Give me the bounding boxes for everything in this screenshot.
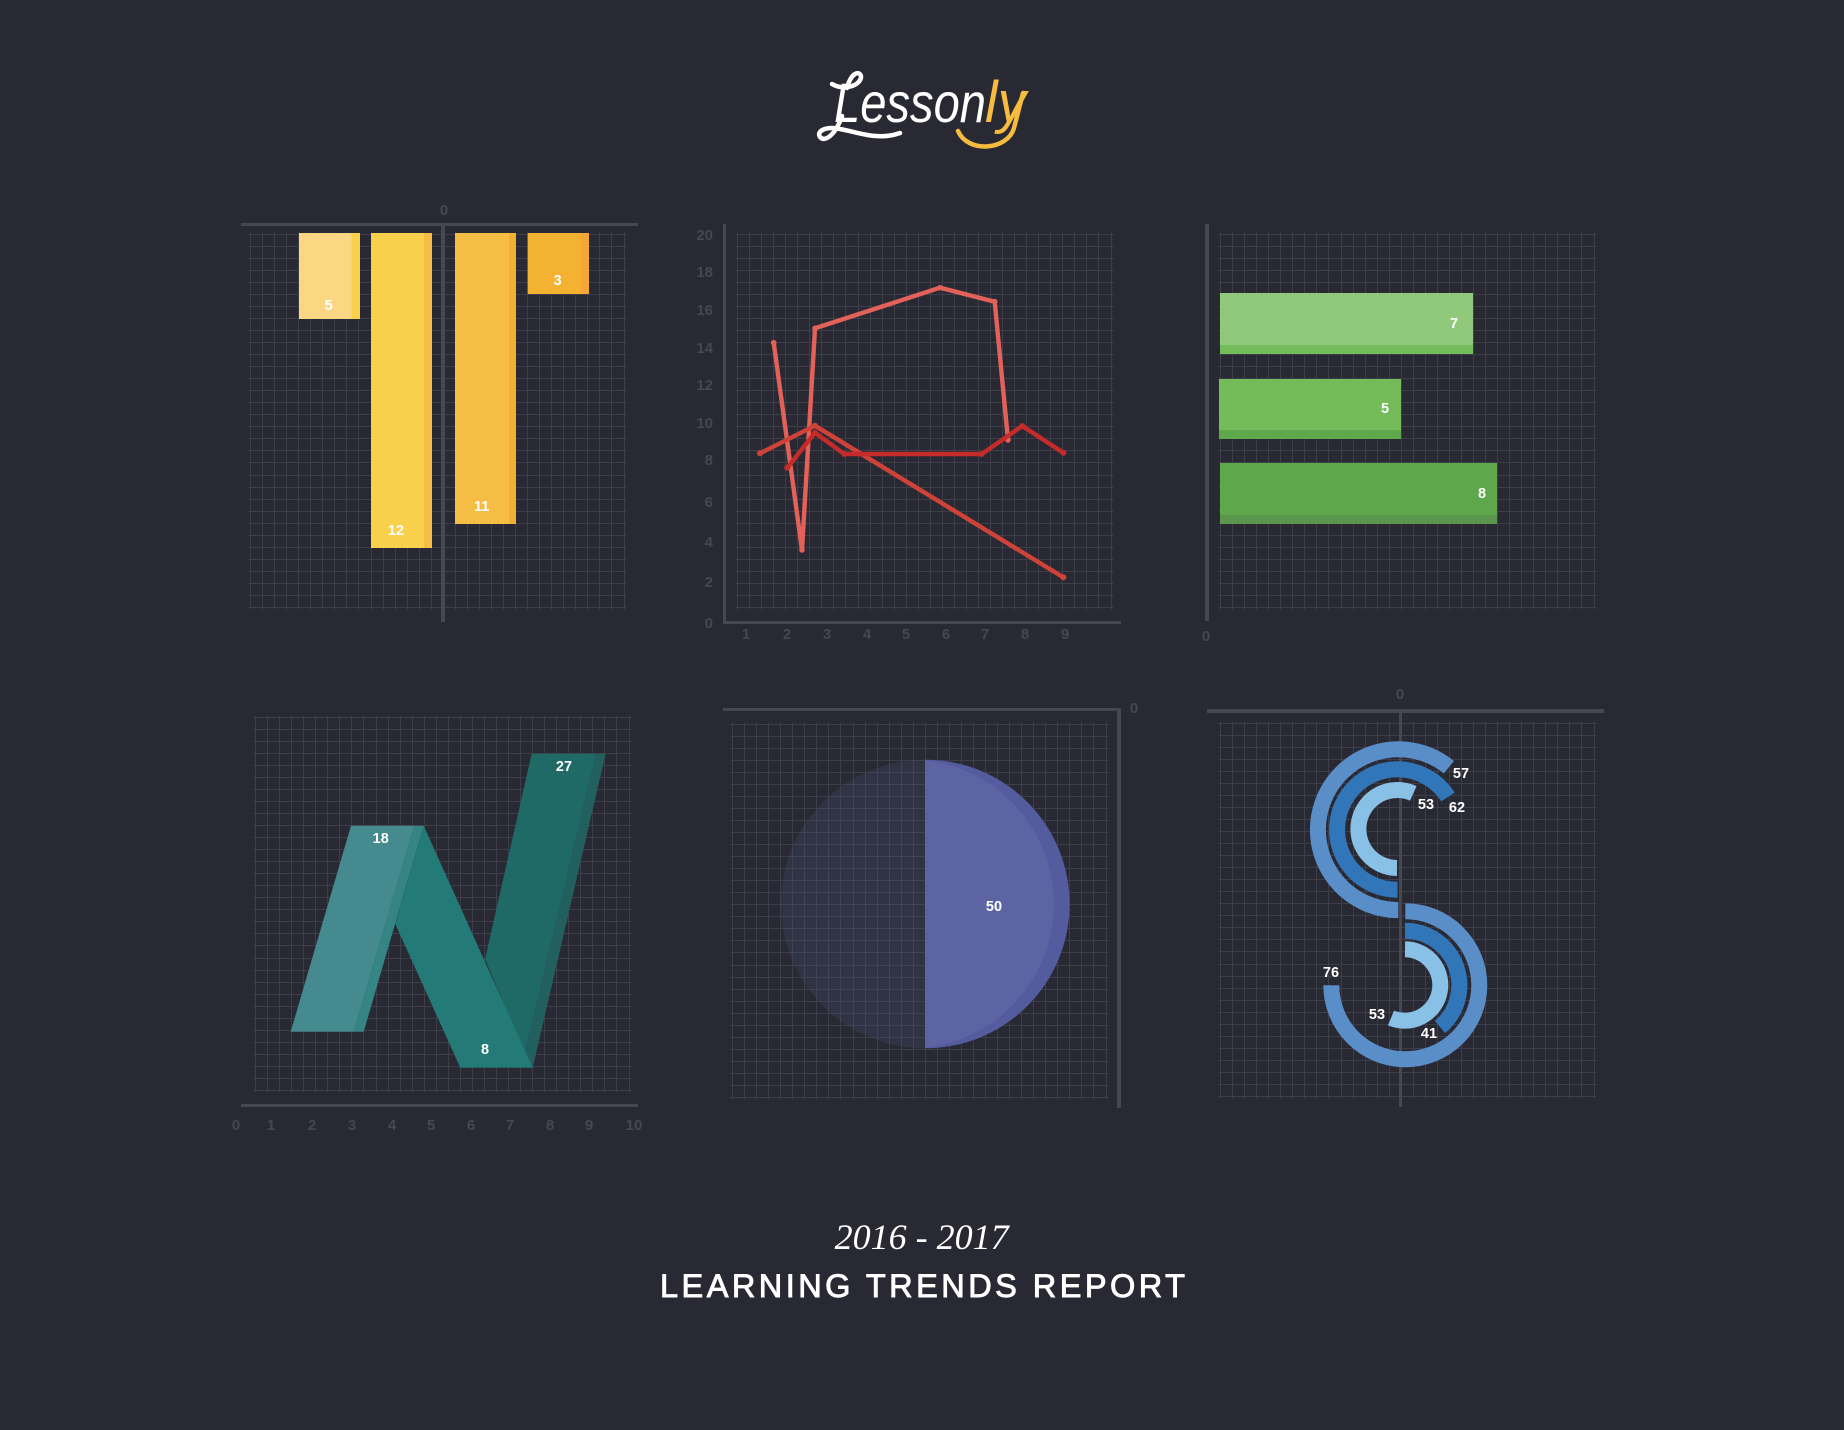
x axis labels <box>742 626 1069 643</box>
bar: 11: 11 <box>474 499 489 515</box>
logo swash: L top loop <box>832 73 861 88</box>
footer title <box>660 1217 1185 1304</box>
x axis labels: 0 <box>232 1117 240 1134</box>
y axis labels: 2 <box>705 574 713 591</box>
logo wordmark: Lesson: Lesson <box>834 71 986 134</box>
axis <box>241 1104 638 1107</box>
panel: purple pie chart <box>723 700 1138 1108</box>
ring values: 53 <box>1418 797 1434 813</box>
grid <box>730 722 1108 1100</box>
axis label: 0 <box>1130 700 1138 717</box>
x axis labels: 3 <box>823 626 831 643</box>
x axis labels: 7 <box>506 1117 514 1134</box>
grid <box>248 232 626 610</box>
pie: filled half <box>925 760 1070 1048</box>
bar: 5: 5 <box>325 298 333 314</box>
ring values <box>1323 766 1469 1042</box>
x axis labels: 4 <box>863 626 872 643</box>
y axis labels: 6 <box>705 494 713 511</box>
x axis labels: 10 <box>626 1117 642 1134</box>
x axis labels: 5 <box>427 1117 435 1134</box>
bar: 12: 12 <box>388 523 404 539</box>
bar: 12 <box>371 233 432 548</box>
bar: 5 <box>1219 379 1401 439</box>
y axis labels: 14 <box>696 340 714 357</box>
x axis labels: 9 <box>1061 626 1069 643</box>
panel: red line chart <box>696 224 1121 643</box>
pie: empty half <box>781 760 925 1048</box>
bar: 3: 3 <box>554 273 562 289</box>
x axis labels <box>232 1117 642 1134</box>
ribbon: 18 <box>291 826 424 1032</box>
year: 2016 - 2017 <box>835 1217 1011 1257</box>
ribbon: 27 <box>485 754 606 1068</box>
y axis labels <box>696 227 714 632</box>
x axis labels: 5 <box>902 626 910 643</box>
line: dark red series <box>784 423 1066 471</box>
bar: 5: 5 <box>1381 401 1389 417</box>
line: medium red series <box>757 423 1066 580</box>
logo swash: L tail <box>819 116 900 139</box>
bar: 5 <box>299 233 360 319</box>
x axis labels: 4 <box>388 1117 397 1134</box>
bar: 3 <box>528 233 589 294</box>
ribbon: 8: 8 <box>481 1042 489 1058</box>
x axis labels: 8 <box>1021 626 1029 643</box>
x axis labels: 6 <box>942 626 950 643</box>
report name: LEARNING TRENDS REPORT <box>660 1268 1185 1304</box>
x axis labels: 2 <box>783 626 791 643</box>
bar: 8: 8 <box>1478 486 1486 502</box>
ring values: 41 <box>1421 1026 1437 1042</box>
bar: 8 <box>1220 463 1497 524</box>
logo wordmark: ly: ly <box>985 70 1029 135</box>
bar: 11 <box>455 233 516 524</box>
axis label: 0 <box>1202 628 1210 645</box>
ring values: 76 <box>1323 965 1339 981</box>
y axis labels: 20 <box>696 227 713 244</box>
ring values: 62 <box>1449 800 1465 816</box>
axes <box>723 224 1121 624</box>
ribbon: 18: 18 <box>373 831 389 847</box>
upper rings <box>1318 749 1449 910</box>
panel: teal ribbon chart <box>232 716 642 1134</box>
panel: green bar chart <box>1202 224 1596 645</box>
grid <box>1218 722 1596 1098</box>
y axis labels: 8 <box>705 452 713 469</box>
pie value: 50 <box>986 899 1002 915</box>
line: light red series <box>771 285 1011 553</box>
x axis labels: 1 <box>742 626 750 643</box>
ribbon: 8 <box>395 826 533 1068</box>
axis <box>1205 224 1209 621</box>
axes <box>723 708 1121 1108</box>
ring values: 57 <box>1453 766 1469 782</box>
bar: 7: 7 <box>1450 316 1458 332</box>
ring values: 53 <box>1369 1007 1385 1023</box>
panel: yellow column chart <box>241 202 638 622</box>
x axis labels: 6 <box>467 1117 475 1134</box>
grid <box>254 716 632 1092</box>
logo: Lessonly <box>819 70 1029 146</box>
x axis labels: 7 <box>981 626 989 643</box>
x axis labels: 2 <box>308 1117 316 1134</box>
y axis labels: 4 <box>705 534 714 551</box>
ribbon: 27: 27 <box>556 759 572 775</box>
axes <box>1207 709 1604 1107</box>
grid <box>1218 232 1596 610</box>
y axis labels: 18 <box>696 264 713 281</box>
panel: blue ring chart <box>1207 686 1604 1107</box>
x axis labels: 9 <box>585 1117 593 1134</box>
logo swash: y tail <box>958 93 1023 146</box>
y axis labels: 16 <box>696 302 713 319</box>
lower rings <box>1331 911 1479 1059</box>
y axis labels: 0 <box>705 615 713 632</box>
x axis labels: 3 <box>348 1117 356 1134</box>
y axis labels: 12 <box>696 377 713 394</box>
axes <box>241 223 638 622</box>
bar: 7 <box>1220 293 1473 354</box>
axis label: 0 <box>1396 686 1404 703</box>
x axis labels: 8 <box>546 1117 554 1134</box>
axis label: 0 <box>440 202 448 219</box>
x axis labels: 1 <box>267 1117 275 1134</box>
grid <box>736 232 1114 610</box>
y axis labels: 10 <box>696 415 713 432</box>
